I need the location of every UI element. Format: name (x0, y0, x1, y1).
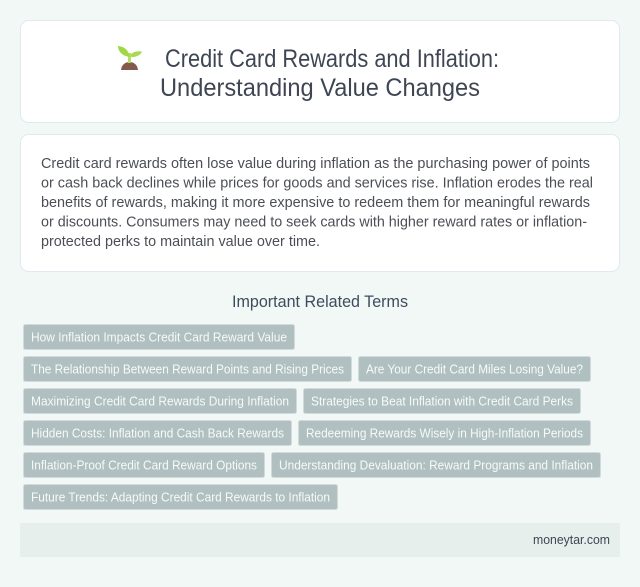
footer: moneytar.com (533, 532, 610, 547)
tag (304, 388, 580, 414)
tag: Strategies to Beat Inflation with Credit Card Perks (311, 394, 573, 408)
text block: description: or discounts. Consumers may need to seek cards with higher reward rates or inflation- (41, 214, 587, 230)
tag (24, 324, 294, 350)
tag (24, 420, 292, 446)
text block: description: protected perks to maintain value over time. (41, 233, 320, 250)
tag list (24, 324, 600, 510)
tag: How Inflation Impacts Credit Card Reward Value (31, 330, 287, 344)
panel: description (20, 134, 620, 272)
text block: description: or cash back declines while prices for goods and services rise. Inflation erodes the real (41, 174, 593, 192)
tag (272, 452, 600, 478)
footer (20, 523, 620, 557)
panel: title card (20, 20, 620, 122)
tag: Inflation-Proof Credit Card Reward Options (31, 458, 257, 472)
text block: description: benefits of rewards, making it more expensive to redeem them for meaningful rewards (41, 194, 590, 211)
tag (24, 388, 296, 414)
tag: Maximizing Credit Card Rewards During Inflation (31, 394, 289, 408)
title: Understanding Value Changes (160, 74, 480, 102)
tag: Future Trends: Adapting Credit Card Rewards to Inflation (31, 490, 330, 504)
icon: sprout (118, 46, 142, 70)
tag: The Relationship Between Reward Points and Rising Prices (31, 362, 344, 376)
title (160, 45, 499, 102)
tag: Understanding Devaluation: Reward Programs and Inflation (279, 458, 593, 472)
tag (298, 420, 590, 446)
title: Credit Card Rewards and Inflation: (165, 45, 499, 73)
tag: Hidden Costs: Inflation and Cash Back Rewards (31, 426, 284, 440)
tag (358, 356, 590, 382)
tag (24, 484, 338, 510)
tag: Are Your Credit Card Miles Losing Value? (366, 362, 583, 376)
text block: description (41, 155, 593, 250)
tag (24, 452, 264, 478)
heading: related terms: Important Related Terms (232, 293, 408, 311)
text block: description: Credit card rewards often lose value during inflation as the purchasing power of points (41, 155, 590, 172)
tag: Redeeming Rewards Wisely in High-Inflation Periods (306, 426, 583, 440)
tag (24, 356, 352, 382)
